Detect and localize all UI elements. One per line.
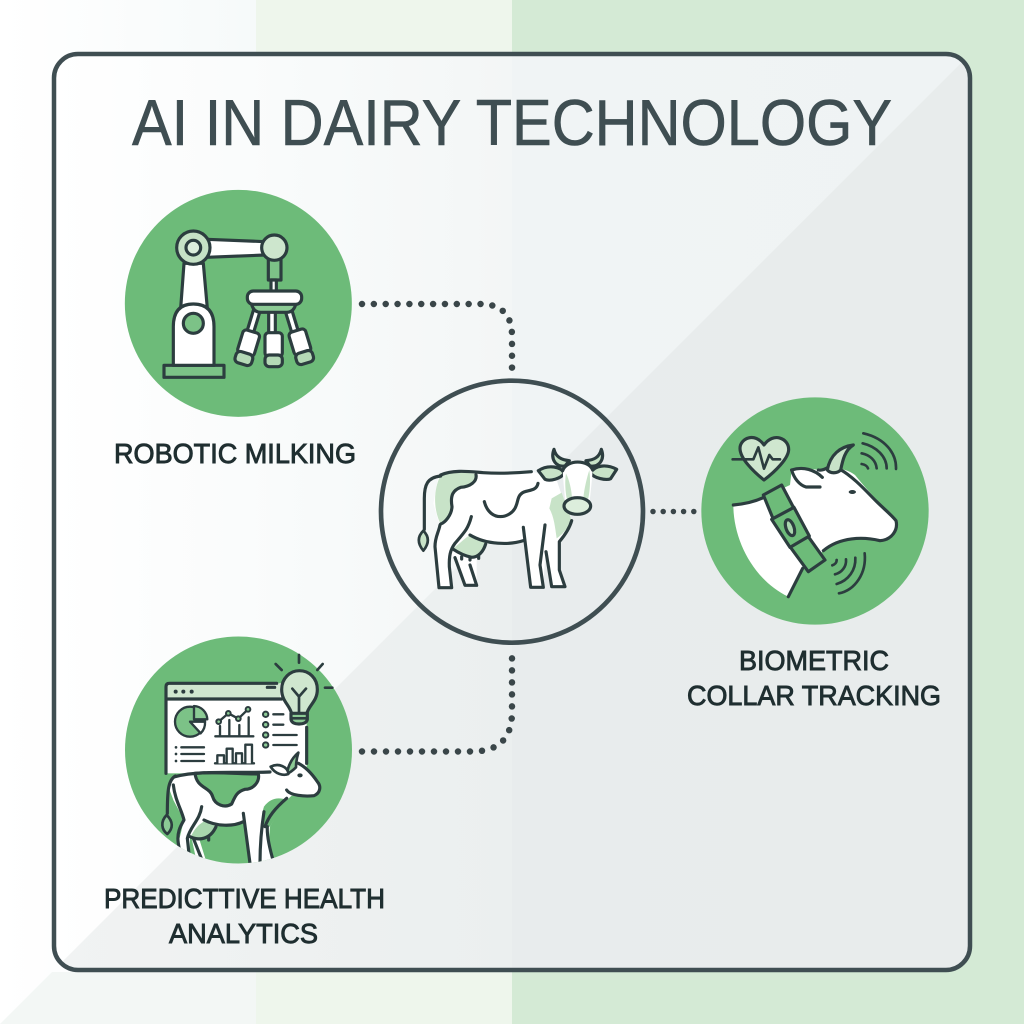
label: biometric collar tracking bbox=[687, 645, 941, 711]
signal waves bbox=[862, 433, 896, 469]
cow bbox=[162, 753, 321, 865]
right finger bbox=[282, 308, 315, 366]
signal waves lower bbox=[832, 553, 865, 593]
heart with pulse bbox=[733, 438, 789, 480]
icon: robotic milking bbox=[125, 190, 352, 417]
label: predictive health analytics bbox=[104, 883, 385, 949]
left finger bbox=[234, 309, 267, 367]
label: predictive health analytics: PREDICTTIVE HEALTH bbox=[104, 883, 385, 914]
dashboard window bbox=[166, 683, 307, 773]
connector: collar to cow bbox=[653, 509, 694, 514]
light bulb bbox=[276, 655, 332, 724]
label: predictive health analytics: ANALYTICS bbox=[169, 918, 318, 949]
connector: robotic milking to cow bbox=[362, 304, 512, 372]
label: biometric collar tracking: BIOMETRIC bbox=[739, 645, 889, 676]
icon: central cow bbox=[381, 381, 643, 643]
icon: predictive health analytics bbox=[125, 636, 352, 865]
head bbox=[538, 449, 617, 514]
icon: biometric collar bbox=[701, 397, 929, 625]
label: biometric collar tracking: COLLAR TRACKING bbox=[687, 680, 941, 711]
connector: predictive analytics to cow bbox=[362, 654, 512, 752]
title: AI IN DAIRY TECHNOLOGY bbox=[132, 86, 892, 159]
label: robotic milking: ROBOTIC MILKING bbox=[114, 438, 356, 469]
centre finger bbox=[265, 312, 282, 367]
